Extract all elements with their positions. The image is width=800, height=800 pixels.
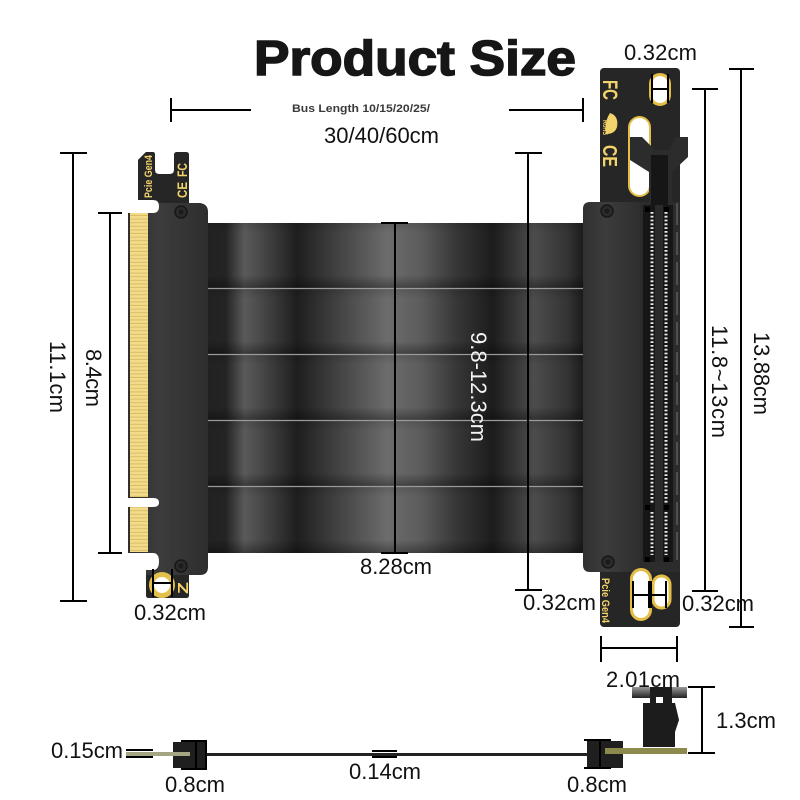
right connector bbox=[643, 703, 679, 747]
hole label bottom b: 0.32cm bbox=[682, 591, 754, 616]
board markings: Pcie Gen4 bbox=[599, 578, 611, 624]
board markings: Pcie Gen4 bbox=[143, 154, 155, 198]
hole label left: 0.32cm bbox=[134, 600, 206, 625]
board markings: RoHS bbox=[601, 120, 608, 135]
gold ovals bbox=[629, 74, 670, 620]
gold fingers bbox=[130, 213, 148, 552]
hole label 11.8: 11.8~13cm bbox=[707, 325, 732, 438]
cable thickness label: 0.14cm bbox=[349, 759, 421, 784]
board markings: CE bbox=[174, 182, 190, 198]
board markings: FC bbox=[598, 80, 621, 100]
plug label right: 0.8cm bbox=[567, 772, 627, 797]
board markings: CE bbox=[598, 145, 620, 167]
board markings bbox=[598, 80, 621, 624]
hole label bottom a: 0.32cm bbox=[523, 590, 596, 615]
length label second line: 30/40/60cm bbox=[324, 123, 439, 148]
height label 1.3cm: 1.3cm bbox=[716, 708, 776, 733]
thickness label: 0.15cm bbox=[51, 738, 123, 763]
screws bbox=[601, 205, 614, 568]
cable length label: 9.8-12.3cm bbox=[466, 332, 491, 442]
right PCIe slot board bbox=[583, 68, 688, 627]
plug label left: 0.8cm bbox=[165, 772, 225, 797]
width label: 8.28cm bbox=[360, 554, 432, 579]
finger label 8.4cm: 8.4cm bbox=[81, 349, 106, 407]
height label 13.88cm: 13.88cm bbox=[749, 332, 774, 415]
board markings: FC bbox=[174, 163, 190, 177]
left PCIe edge connector bbox=[128, 152, 208, 598]
height label 11.1cm: 11.1cm bbox=[45, 341, 70, 413]
right gold board bbox=[605, 748, 687, 754]
title: Product Size bbox=[254, 32, 576, 86]
board markings bbox=[143, 154, 192, 594]
left plug bbox=[173, 742, 207, 768]
latch bar bbox=[632, 687, 687, 698]
left gold pin bbox=[126, 752, 190, 756]
ribbon cable bbox=[207, 223, 583, 553]
card slot bbox=[643, 203, 677, 562]
length label: Bus Length 10/15/20/25/ bbox=[292, 103, 430, 115]
dimension lines bbox=[60, 69, 754, 769]
board width label: 2.01cm bbox=[606, 667, 680, 692]
right plug bbox=[587, 741, 623, 768]
cable side bbox=[205, 753, 587, 756]
screws bbox=[175, 206, 187, 572]
side view assembly bbox=[126, 687, 687, 768]
hole label top: 0.32cm bbox=[624, 40, 697, 65]
slot latch bbox=[630, 137, 688, 205]
mounting hole bbox=[152, 574, 172, 596]
board markings: Z bbox=[175, 582, 192, 594]
